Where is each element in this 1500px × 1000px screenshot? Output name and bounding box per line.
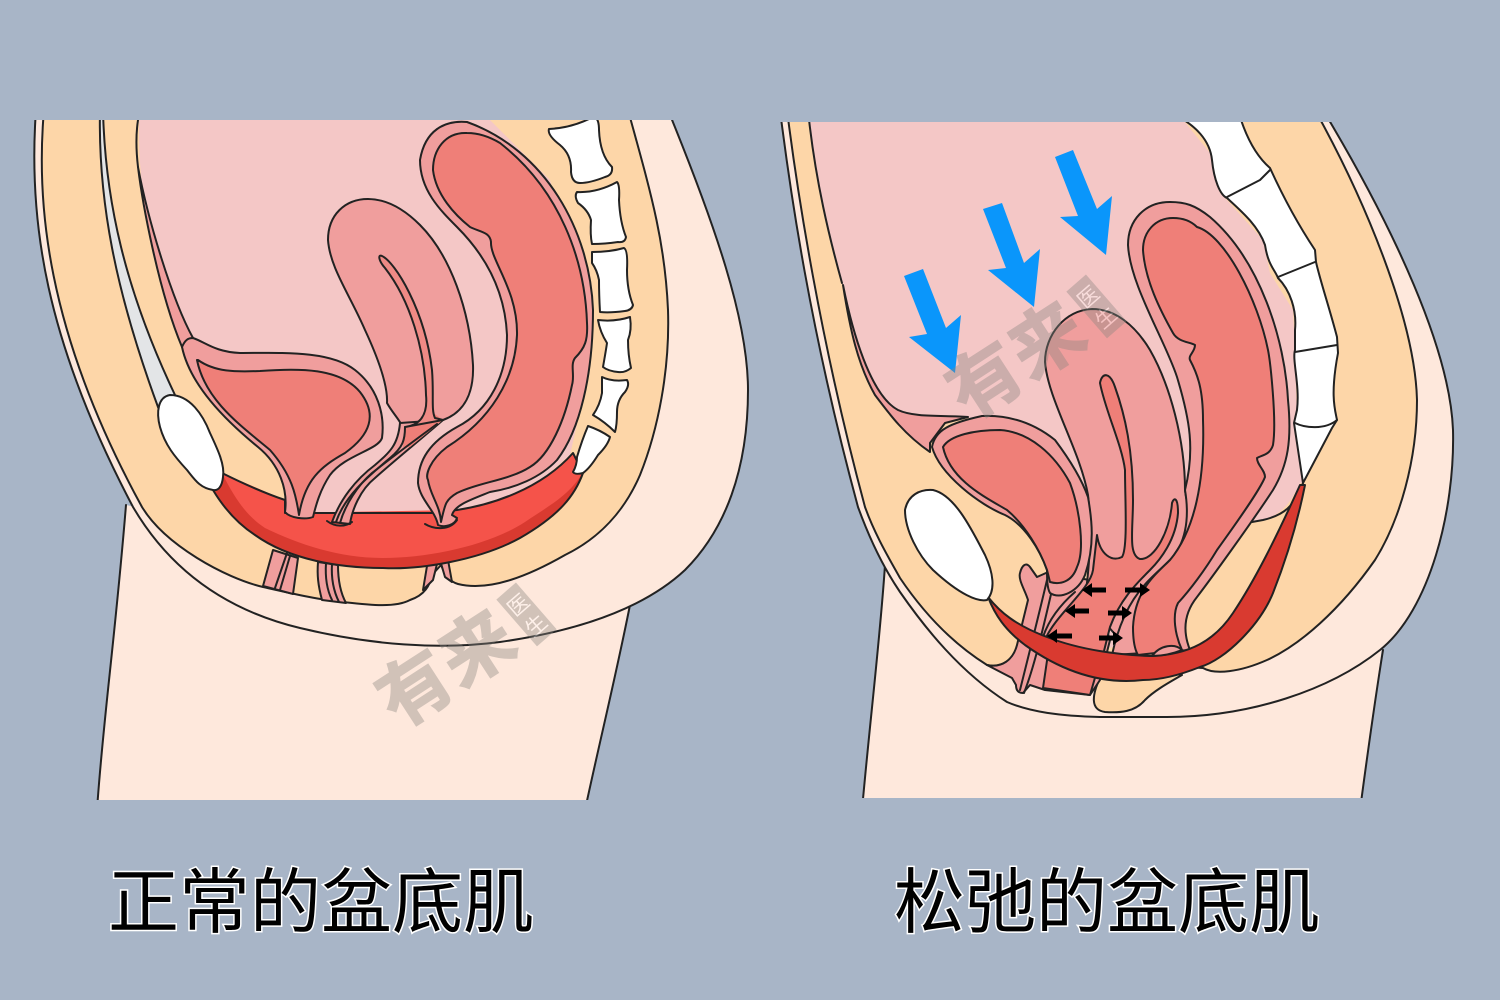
watermark left [364,574,564,743]
pelvic floor muscle [213,453,583,568]
cavity edge [136,110,140,167]
pelvic cavity [808,110,1303,650]
watermark left: 生 [521,611,552,642]
icon: small black arrows, vaginal widening [1047,583,1150,645]
watermark right: 医 [1073,282,1104,313]
bladder [182,338,383,518]
icon: blue pressure arrow 3 [1055,150,1112,255]
icon: blue pressure arrow 2 [983,203,1040,307]
pubic bone [905,490,993,600]
fat layer [42,110,668,605]
cavity edges [808,110,1303,522]
pelvic cavity [139,110,585,513]
watermark left: 来 [426,596,530,703]
watermark right [934,266,1134,435]
pubic bone [158,395,223,490]
rectum [418,122,593,528]
rectum [1112,202,1289,655]
uterine cavity and vagina [1045,375,1178,655]
sacrum [1175,110,1338,483]
uterus and vagina [327,199,473,526]
icon: blue pressure arrow 1 [904,269,961,373]
panel: relaxed pelvic floor [780,110,1453,810]
watermark right: 生 [1091,303,1122,334]
title: relaxed pelvic floor: 松弛的盆底肌 [894,864,1320,943]
gluteal fat [1094,670,1182,712]
bladder [932,416,1092,596]
pelvic floor muscle, sagging [988,485,1305,681]
peritoneal sliver [138,167,193,347]
fat layer [787,110,1417,672]
watermark left: 医 [503,590,534,621]
watermark left: 有 [364,637,468,743]
spine vertebrae [549,117,633,474]
body outline [780,110,1453,717]
leg [97,505,630,810]
abdominal wall strip [100,110,175,407]
perineal passages [263,550,452,603]
title: normal pelvic floor: 正常的盆底肌 [108,864,534,943]
perineal passages [987,565,1110,695]
panel: normal pelvic floor [34,110,748,810]
uterus [1045,309,1190,640]
body outline [34,110,748,646]
peritoneal sliver [843,285,968,452]
watermark right: 来 [996,288,1100,395]
leg [862,565,1383,810]
watermark right: 有 [934,329,1038,435]
